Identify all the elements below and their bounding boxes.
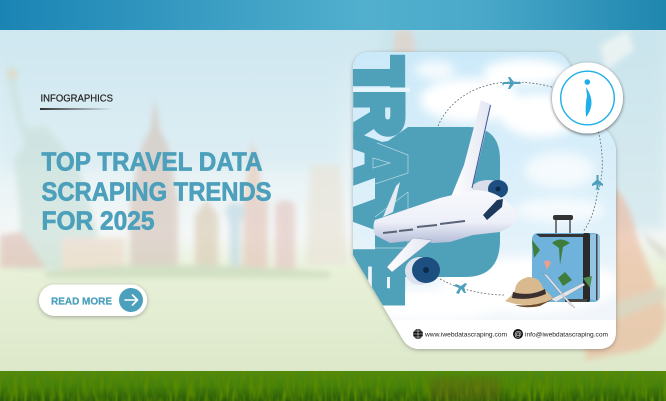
read more button: READ MORE	[51, 296, 112, 308]
label: infographics: INFOGRAPHICS	[40, 92, 113, 104]
clouds	[360, 59, 620, 321]
logo badge	[552, 62, 623, 134]
read more button	[39, 284, 147, 316]
footer: email: info@iwebdatascraping.com	[525, 332, 608, 338]
dotted flight path	[438, 82, 602, 295]
toy plane	[543, 273, 585, 308]
icon: globe	[413, 329, 423, 339]
top banner	[0, 0, 666, 30]
fuselage	[374, 190, 518, 243]
lower engine	[405, 257, 440, 285]
upper engine	[471, 180, 508, 198]
label: infographics	[40, 92, 113, 110]
teal blob	[375, 127, 500, 277]
suitcase	[532, 215, 600, 302]
icon: plane right	[592, 175, 603, 190]
cockpit	[483, 199, 503, 220]
icon: at sign: @	[514, 330, 522, 338]
footer: website	[413, 329, 507, 339]
gap between T and R	[353, 88, 410, 92]
footer: email	[513, 329, 608, 339]
lower wing	[387, 238, 432, 272]
title: TOP TRAVEL DATA	[42, 146, 263, 176]
icon: plane top	[502, 77, 521, 89]
icon: plane bottom	[454, 283, 467, 294]
upper wing	[451, 100, 491, 197]
footer: website: www.iwebdatascraping.com	[424, 332, 507, 338]
icon: arrow	[119, 288, 143, 312]
tail fin	[383, 182, 400, 217]
letter outlines over blob	[373, 143, 408, 248]
windows	[383, 221, 465, 233]
title	[42, 146, 272, 236]
hat	[505, 277, 553, 307]
card footer	[392, 320, 616, 349]
panel: travel card	[343, 52, 620, 349]
title: SCRAPING TRENDS	[42, 176, 272, 206]
airplane	[374, 100, 518, 285]
big vertical word TRAVEL: TRAVEL	[343, 58, 415, 327]
bottom grass band	[0, 371, 666, 401]
card shadow	[353, 52, 616, 349]
title: FOR 2025	[42, 206, 154, 236]
